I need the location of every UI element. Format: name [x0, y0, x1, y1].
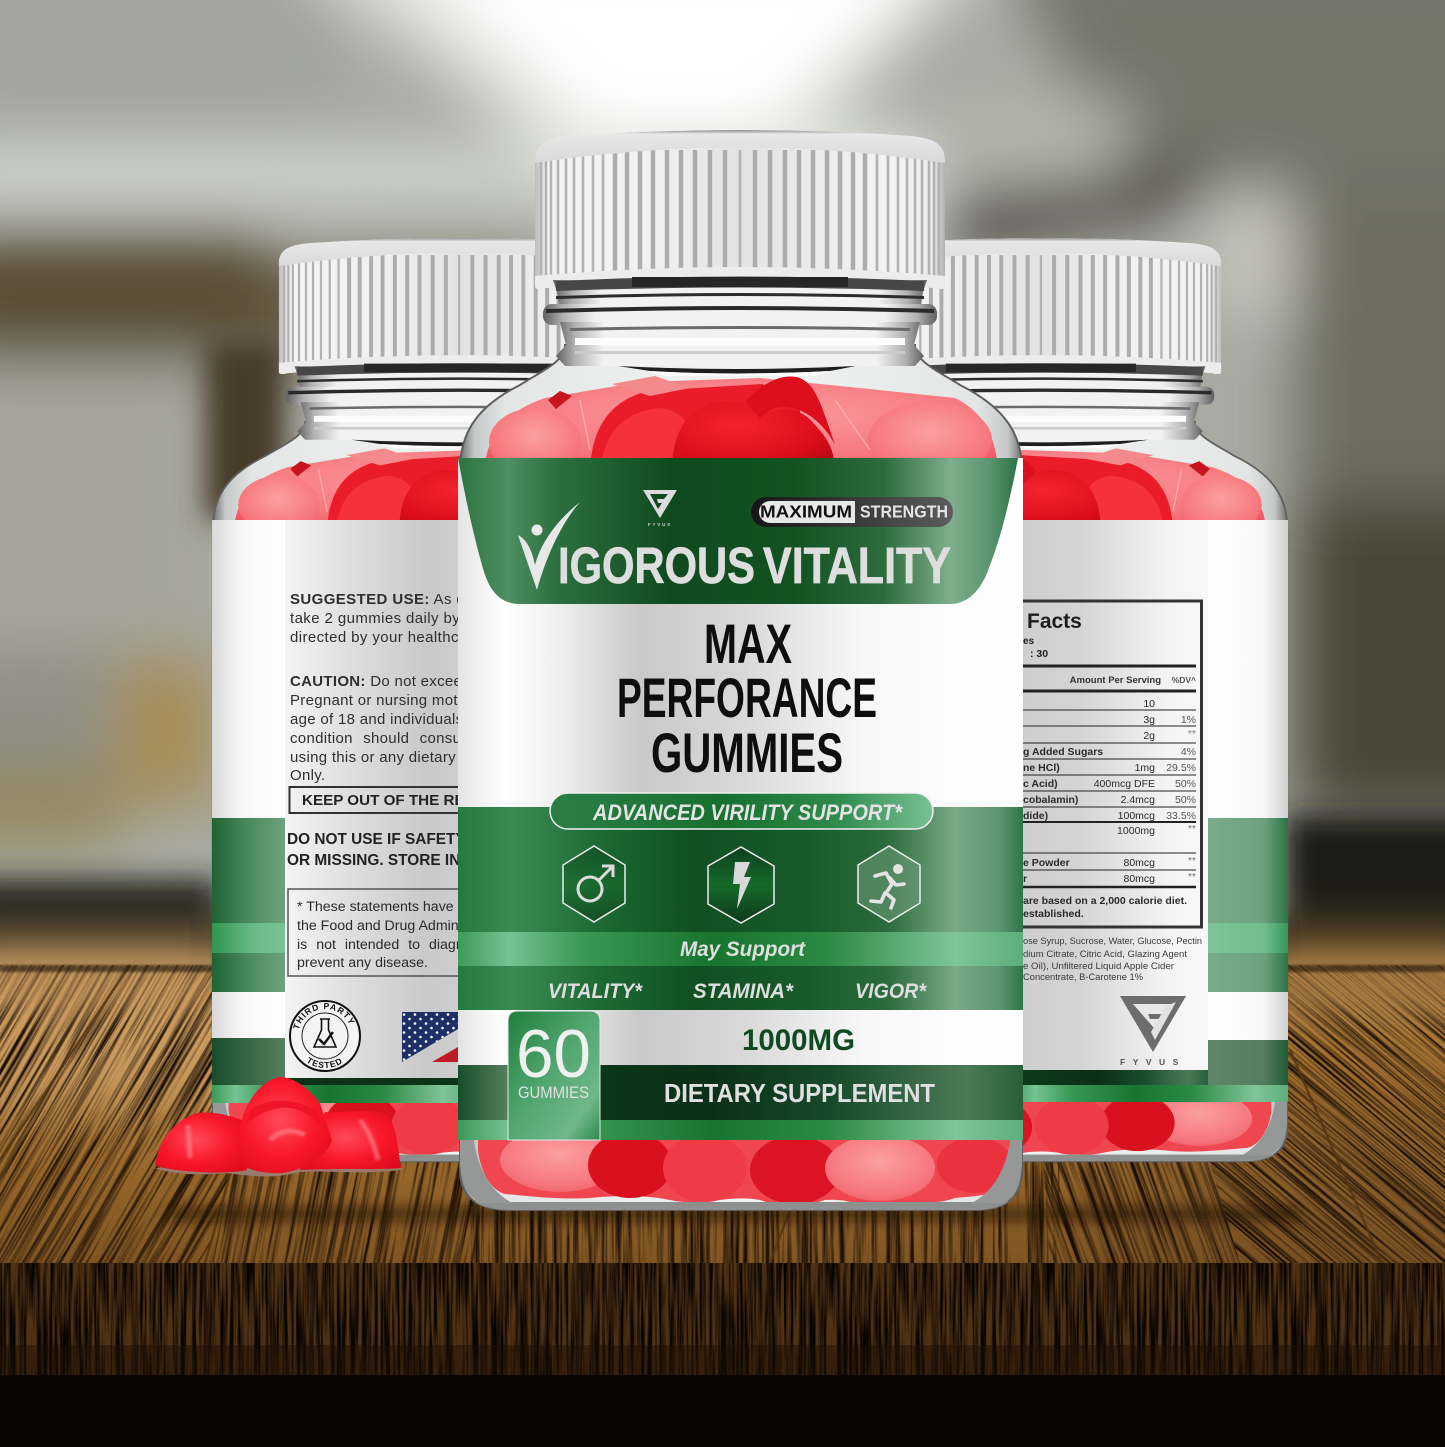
- FYVUS logo: [1120, 996, 1186, 1067]
- 1000MG strength: [458, 1010, 1023, 1065]
- icon: runner: [858, 846, 920, 922]
- storage warning: DO NOT USE IF SAFETY: [287, 831, 466, 848]
- FDA disclaimer box: the Food and Drug Admin: [297, 918, 459, 934]
- nutrient rows: g Added Sugars: [1023, 746, 1103, 758]
- nutrient rows: dide): [1023, 810, 1048, 822]
- nutrient rows: c Acid): [1023, 778, 1058, 790]
- product title: MAX: [704, 612, 792, 675]
- nutrient rows: **: [1188, 871, 1196, 883]
- right gummy: [300, 1111, 401, 1170]
- left label panel: [212, 520, 475, 1103]
- nutrient rows: 2.4mcg: [1121, 794, 1155, 806]
- ingredients list: dium Citrate, Citric Acid, Glazing Agent: [1023, 949, 1187, 960]
- advanced virility pill: [550, 793, 933, 829]
- bottom green stripe: [458, 1120, 1023, 1140]
- keep out of reach box: KEEP OUT OF THE REACH: [302, 792, 498, 809]
- dietary supplement band: DIETARY SUPPLEMENT: [664, 1078, 935, 1108]
- brand header: [458, 458, 1018, 604]
- storage warning: [287, 831, 466, 869]
- suggested use text: take 2 gummies daily by: [290, 610, 460, 627]
- nutrient rows: **: [1188, 728, 1196, 740]
- nutrient rows: 400mcg DFE: [1094, 778, 1155, 790]
- nutrient rows: [1023, 698, 1196, 885]
- nutrient rows: 80mcg: [1123, 873, 1155, 885]
- maximum strength pill: MAXIMUM: [760, 502, 852, 522]
- nutrient rows: 80mcg: [1123, 857, 1155, 869]
- nutrient rows: 1000mg: [1117, 825, 1155, 837]
- benefit words band: VIGOR*: [855, 980, 927, 1003]
- FDA disclaimer box: * These statements have: [297, 899, 454, 915]
- nutrient rows: 3g: [1143, 714, 1155, 726]
- nutrient rows: e Powder: [1023, 857, 1070, 869]
- ingredients list: [1023, 936, 1202, 983]
- middle gummy: [238, 1077, 332, 1173]
- 60 gummies badge: GUMMIES: [518, 1083, 589, 1102]
- V swoosh logo: [518, 502, 580, 590]
- footnote: established.: [1023, 908, 1084, 920]
- facts heading: Facts: [1027, 610, 1082, 633]
- maximum strength pill: STRENGTH: [860, 502, 948, 522]
- caution text: condition should consult: [290, 730, 470, 747]
- supplement facts box: [1015, 601, 1202, 927]
- center bottle (front): [458, 124, 1023, 1210]
- suggested use text: SUGGESTED USE: As directed: [290, 591, 513, 608]
- may support band: May Support: [680, 938, 806, 961]
- facts heading: [1023, 610, 1082, 660]
- American flag: [402, 1012, 470, 1062]
- left bottle (back, supplement directions): [212, 238, 748, 1198]
- nutrient rows: 33.5%: [1166, 810, 1196, 822]
- FYVUS logo small: [643, 490, 677, 527]
- nutrient rows: 50%: [1175, 794, 1196, 806]
- caution text: Pregnant or nursing mothers: [290, 692, 488, 709]
- facts heading: es: [1023, 636, 1035, 647]
- caution text: CAUTION: Do not exceed: [290, 673, 471, 690]
- center jar and cap: [460, 124, 1022, 1210]
- table underside shadow: [0, 1375, 1445, 1447]
- FDA disclaimer box: is not intended to diagnose: [297, 937, 487, 953]
- product title: PERFORANCE: [617, 666, 877, 729]
- ingredients list: ose Syrup, Sucrose, Water, Glucose, Pectin: [1023, 936, 1202, 947]
- suggested use text: [290, 591, 513, 646]
- nutrient rows: 100mcg: [1118, 810, 1155, 822]
- table rules: [1015, 666, 1196, 887]
- may support band: [458, 932, 1023, 966]
- FDA disclaimer box: [288, 889, 487, 976]
- third party tested seal: THIRD PARTY: [293, 1003, 355, 1028]
- brand name: IGOROUS: [558, 537, 755, 594]
- label white base: [458, 458, 1023, 1140]
- advanced virility pill: ADVANCED VIRILITY SUPPORT*: [592, 800, 903, 825]
- nutrient rows: 2g: [1143, 730, 1155, 742]
- footnote: [1023, 895, 1187, 920]
- right bottle (back, supplement facts): [793, 233, 1288, 1161]
- column headers: %DV^: [1172, 675, 1196, 685]
- brand name: VITALITY: [763, 537, 951, 594]
- loose gummies on the table: [155, 1077, 402, 1176]
- nutrient rows: **: [1188, 823, 1196, 835]
- left bottle jar and cap: [213, 233, 707, 1161]
- third party tested seal: TESTED: [308, 1057, 342, 1068]
- nutrient rows: 10: [1143, 698, 1155, 710]
- nutrient rows: 4%: [1181, 746, 1196, 758]
- facts heading: : 30: [1030, 648, 1048, 660]
- suggested use text: directed by your healthcare: [290, 629, 482, 646]
- footnote: are based on a 2,000 calorie diet.: [1023, 895, 1187, 907]
- benefit words band: STAMINA*: [693, 980, 794, 1003]
- nutrient rows: 50%: [1175, 778, 1196, 790]
- keep out of reach box: [290, 787, 498, 813]
- 60 gummies badge: [508, 1011, 600, 1140]
- blurred room background: [0, 0, 1445, 975]
- caution text: Only.: [290, 767, 325, 784]
- nutrient rows: **: [1188, 855, 1196, 867]
- right bottle jar and cap: [793, 233, 1287, 1161]
- right label panel: [1010, 520, 1288, 1102]
- maximum strength pill: [751, 497, 953, 527]
- brand name: [558, 537, 951, 594]
- FYVUS logo small: FYVUS: [648, 522, 672, 527]
- nutrient rows: ne HCl): [1023, 762, 1060, 774]
- dietary supplement band: [458, 1065, 1023, 1120]
- FDA disclaimer box: prevent any disease.: [297, 955, 428, 971]
- left gummy: [155, 1113, 247, 1172]
- third party tested seal: [289, 1000, 361, 1072]
- wooden table: [0, 945, 1445, 1447]
- storage warning: OR MISSING. STORE IN: [287, 852, 460, 869]
- nutrient rows: cobalamin): [1023, 794, 1078, 806]
- caution text: [290, 673, 488, 784]
- benefit words band: VITALITY*: [548, 980, 643, 1003]
- column headers: Amount Per Serving: [1070, 675, 1161, 686]
- ingredients list: Concentrate, B-Carotene 1%: [1023, 972, 1143, 983]
- table top surface: [0, 945, 1445, 1270]
- benefits band: [458, 793, 1023, 932]
- nutrient rows: 29.5%: [1166, 762, 1196, 774]
- nutrient rows: 1mg: [1135, 762, 1155, 774]
- FYVUS logo: FYVUS: [1120, 1057, 1186, 1067]
- nutrient rows: r: [1023, 873, 1027, 885]
- ingredients list: e Oil), Unfiltered Liquid Apple Cider: [1023, 961, 1175, 972]
- 1000MG strength: 1000MG: [742, 1024, 855, 1057]
- caution text: age of 18 and individuals: [290, 711, 463, 728]
- 60 gummies badge: 60: [516, 1016, 591, 1092]
- product title: GUMMIES: [651, 721, 843, 784]
- icon: lightning bolt: [708, 847, 774, 923]
- benefit words band: [458, 966, 1023, 1012]
- nutrient rows: 1%: [1181, 714, 1196, 726]
- icon: male symbol: [563, 846, 625, 922]
- product title: [617, 612, 877, 784]
- table front edge: [0, 1263, 1445, 1375]
- caution text: using this or any dietary: [290, 749, 456, 766]
